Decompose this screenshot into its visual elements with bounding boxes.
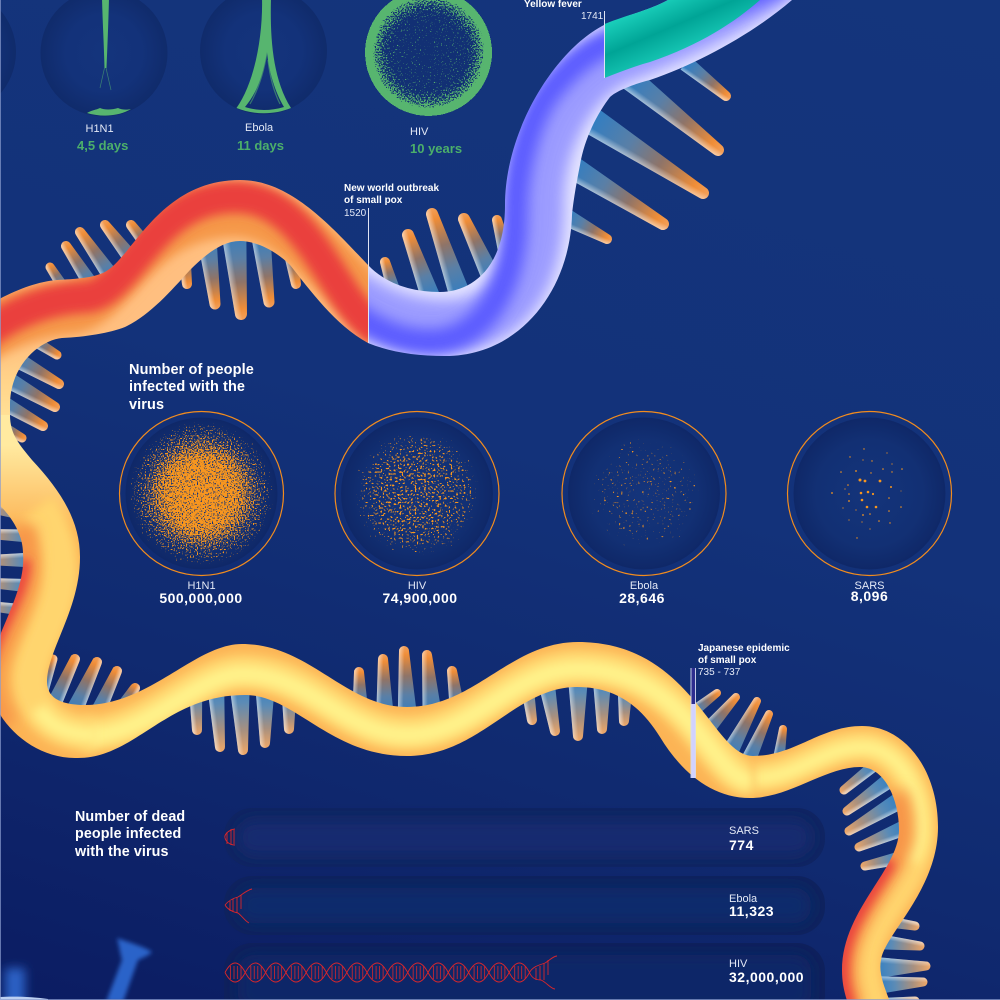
teeth: upper right cluster [560,57,735,249]
bar: Ebola deaths: 11,323 [729,903,774,919]
ribbon: red section [0,180,368,415]
heading: number of dead people: with the virus [74,844,169,860]
teeth: bottom right [873,914,931,1000]
teeth: left edge [0,500,42,617]
heading: number of dead people: Number of dead [75,809,185,825]
label: HIV incubation: 10 years [410,141,462,156]
marker: Japanese epidemic of small pox: of small pox [698,655,757,666]
ribbon: teal section [604,0,760,78]
label: Ebola incubation [237,122,284,153]
teeth: right of ribbon [837,756,910,874]
panel: H1N1 infected dish: 500,000,000 [159,590,243,606]
heading: number of dead people: people infected [75,826,181,842]
label: H1N1 incubation: H1N1 [86,123,114,135]
decoration: microscope silhouettes [0,938,152,1000]
marker: New world outbreak of small pox [344,183,439,343]
teeth: Japanese epidemic group [685,686,789,768]
marker: New world outbreak of small pox: New world outbreak [344,183,439,194]
bar: Ebola deaths: Ebola [729,893,758,905]
marker: Japanese epidemic of small pox: 735 - 737 [698,667,741,678]
marker: Yellow fever: 1741 [581,11,604,22]
panel: HIV infected dish: HIV [408,580,427,592]
bar: HIV deaths: HIV [729,958,748,970]
bar: SARS deaths: SARS [729,825,759,837]
ribbon: yellow section [0,415,938,1000]
heading: number of dead people [74,809,185,860]
label: HIV incubation [410,126,462,156]
bar: HIV deaths [224,943,825,1000]
panel: H1N1 infected dish: H1N1 [187,580,216,592]
ribbon: lavender section [368,0,792,356]
bar: Ebola deaths [224,876,825,935]
label: Ebola incubation: 11 days [237,138,284,153]
heading: number of people infected: Number of people [129,362,254,378]
teeth: red crest hanging [175,225,305,321]
panel: Ebola infected dish: Ebola [630,580,659,592]
icon: Ebola helix [225,889,252,923]
bar: SARS deaths: 774 [729,837,754,853]
label: H1N1 incubation [77,123,128,153]
teeth: left of red ribbon [0,331,68,445]
heading: number of people infected [129,362,254,413]
marker: New world outbreak of small pox: 1520 [344,208,367,219]
circle: off-canvas left strain [0,0,16,115]
panel: H1N1 incubation circle [40,0,168,116]
panel: Ebola incubation circle [200,0,327,114]
panel: Ebola infected dish: 28,646 [619,590,665,606]
teeth: lower hanging group one [188,674,297,756]
panel: HIV infected dish: 74,900,000 [382,590,458,606]
heading: number of people infected: infected with the [129,379,245,395]
bar: HIV deaths: 32,000,000 [729,969,804,985]
marker: Japanese epidemic of small pox [691,643,790,778]
teeth: lavender dip [377,205,516,306]
heading: number of people infected: virus [129,397,164,413]
marker: Japanese epidemic of small pox: Japanese epidemic [698,643,790,654]
teeth: upper left [43,216,162,297]
panel: HIV incubation circle [365,0,492,116]
panel: Ebola infected dish [562,412,726,606]
label: H1N1 incubation: 4,5 days [77,138,128,153]
panel: SARS infected dish [788,412,952,604]
panel: SARS infected dish: SARS [855,580,884,592]
marker: New world outbreak of small pox: of small pox [344,195,403,206]
panel: SARS infected dish: 8,096 [851,588,888,604]
teeth: mid rising [351,645,466,721]
teeth: lower left rising [36,651,143,722]
panel: HIV infected dish [335,412,499,606]
label: HIV incubation: HIV [410,126,429,138]
panel: H1N1 infected dish [120,412,284,606]
teeth: lower hanging group two [519,666,633,741]
icon: HIV helix [225,956,557,989]
label: Ebola incubation: Ebola [245,122,274,134]
icon: SARS helix [225,829,235,845]
marker: Yellow fever [524,0,604,78]
bar: SARS deaths [224,808,825,867]
